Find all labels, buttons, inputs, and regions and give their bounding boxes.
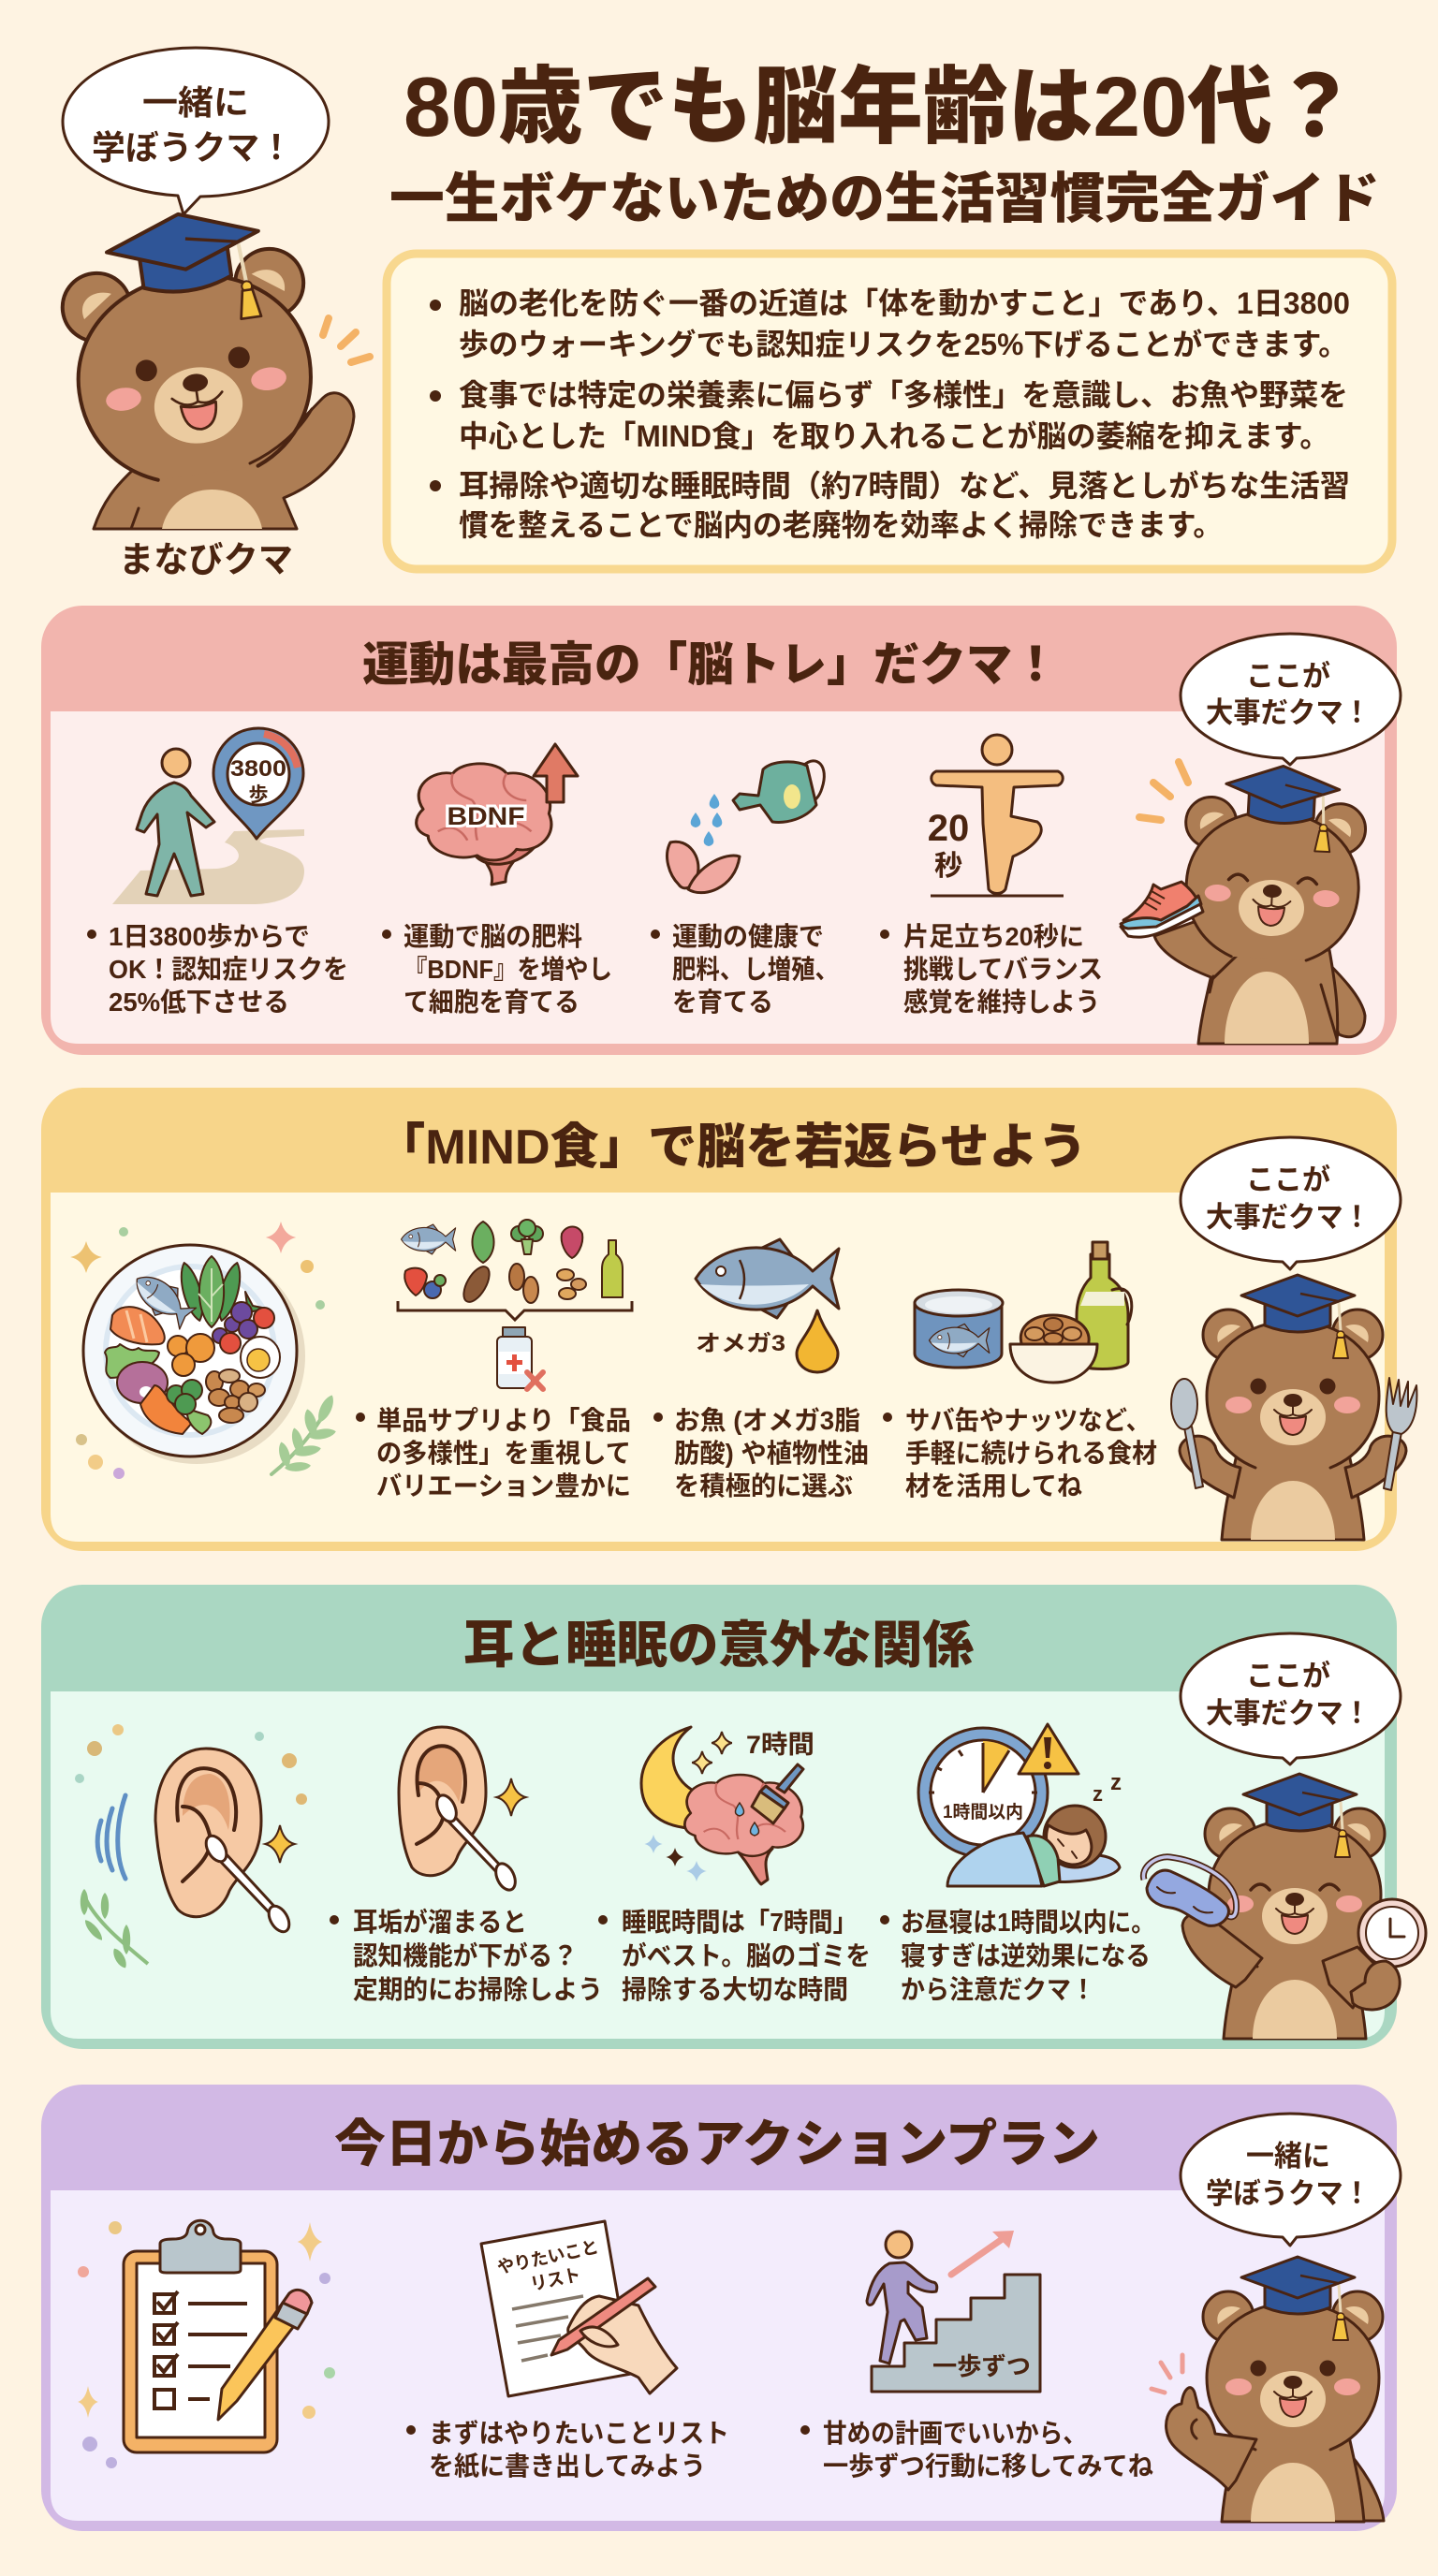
heading: exercise: 運動は最高の「脳トレ」だクマ！ (362, 638, 1059, 691)
summary box (387, 254, 1392, 569)
icon: one-leg balance 20 seconds (928, 735, 1064, 896)
text: action point 2: 甘めの計画でいいから、 (823, 2419, 1087, 2448)
summary box: 耳掃除や適切な睡眠時間（約7時間）など、見落としがちな生活習 (459, 469, 1350, 503)
panel: ears and sleep (41, 1585, 1426, 2049)
panel: exercise (41, 606, 1401, 1055)
text: exercise point 4: 挑戦してバランス (903, 955, 1103, 984)
icon: nap clock and sleeper: 1時間以内 (943, 1802, 1023, 1822)
panel: MIND diet (41, 1088, 1416, 1551)
heading: ears and sleep: 耳と睡眠の意外な関係 (463, 1617, 974, 1674)
text: diet point 1: バリエーション豊かに (376, 1471, 631, 1500)
text: ears point 1: 耳垢が溜まると (353, 1907, 527, 1937)
speech bubble: 一緒に学ぼうクマ: 学ぼうクマ！ (1206, 2177, 1371, 2210)
summary box: 慣を整えることで脳内の老廃物を効率よく掃除できます。 (459, 508, 1223, 542)
icon: walker with 3800 steps pin: 歩 (249, 784, 268, 806)
speech bubble: ここが大事だクマ: ここが (1246, 1660, 1330, 1692)
icon: plate of food (70, 1222, 337, 1479)
speech bubble: 一緒に学ぼうクマ: 一緒に (142, 83, 249, 122)
heading: MIND diet: 「MIND食」で脳を若返らせよう (376, 1120, 1087, 1175)
speech bubble: 一緒に学ぼうクマ (1181, 2114, 1401, 2246)
text: exercise point 1: OK！認知症リスクを (109, 955, 348, 984)
speech bubble: ここが大事だクマ: 大事だクマ！ (1206, 696, 1371, 729)
icon: person climbing stairs (867, 2231, 1040, 2392)
text: action point 2: 一歩ずつ行動に移してみてね (823, 2452, 1153, 2481)
speech bubble: 一緒に学ぼうクマ: 学ぼうクマ！ (92, 128, 293, 167)
icon: canned fish, nuts and oil (915, 1242, 1132, 1383)
text: exercise point 2: て細胞を育てる (404, 988, 580, 1017)
text: action point 1: を紙に書き出してみよう (429, 2452, 706, 2481)
text: exercise point 3 (651, 922, 839, 1017)
subtitle: 一生ボケないための生活習慣完全ガイド (389, 168, 1380, 229)
text: diet point 1: の多様性」を重視して (376, 1439, 631, 1468)
speech bubble: ここが大事だクマ (1181, 1633, 1401, 1764)
heading: action plan: 今日から始めるアクションプラン (334, 2116, 1100, 2173)
mascot: bear with shoe (1121, 761, 1369, 1044)
mascot: bear with spoon and fork (1171, 1275, 1416, 1540)
icon: to-do list and writing hand (481, 2221, 677, 2396)
text: ears point 1: 認知機能が下がる？ (353, 1940, 578, 1970)
text: diet point 2: を積極的に選ぶ (674, 1471, 853, 1500)
text: exercise point 4: 感覚を維持しよう (903, 988, 1100, 1017)
summary box: 歩のウォーキングでも認知症リスクを25%下げることができます。 (459, 328, 1348, 361)
text: exercise point 1 (87, 922, 348, 1017)
icon: food variety over supplements (398, 1220, 632, 1389)
text: exercise point 3: を育てる (672, 988, 773, 1017)
icon: tuna and omega 3 drop: オメガ3 (696, 1331, 785, 1356)
text: action point 2 (800, 2419, 1153, 2481)
text: action point 1 (406, 2419, 729, 2481)
speech bubble: ここが大事だクマ: ここが (1246, 660, 1330, 693)
text: ears point 3: 寝すぎは逆効果になる (901, 1941, 1151, 1970)
icon: ear with swab and sound waves (75, 1724, 307, 1970)
speech bubble: ここが大事だクマ (1181, 1137, 1401, 1269)
text: exercise point 2 (382, 922, 612, 1017)
speech bubble: ここが大事だクマ: 大事だクマ！ (1206, 1697, 1371, 1730)
icon: brain with BDNF: BDNF (448, 802, 524, 830)
text: exercise point 4: 片足立ち20秒に (903, 922, 1084, 951)
icon: ear with cotton swab (399, 1727, 526, 1893)
text: ears point 1 (330, 1907, 603, 2004)
icon: watering can and seeds (668, 761, 824, 893)
summary box: 脳の老化を防ぐ一番の近道は「体を動かすこと」であり、1日3800 (459, 286, 1350, 320)
text: exercise point 3: 肥料、し増殖、 (672, 955, 839, 984)
text: ears point 3: から注意だクマ！ (901, 1975, 1095, 2004)
mascot: まなびクマ waving (51, 198, 370, 529)
speech bubble: ここが大事だクマ: ここが (1246, 1164, 1330, 1196)
panel: action plan (41, 2085, 1401, 2531)
icon: moon, brain and broom, 7 hours: 7時間 (746, 1731, 814, 1759)
icon: to-do list and writing hand: リスト (529, 2265, 582, 2295)
icon: nap clock and sleeper: z (1110, 1770, 1122, 1795)
text: exercise point 3: 運動の健康で (672, 922, 824, 951)
icon: clipboard and pencil (78, 2220, 335, 2468)
text: diet point 3 (883, 1406, 1157, 1500)
text: ears point 1: 定期的にお掃除しよう (353, 1975, 603, 2004)
icon: to-do list and writing hand: やりたいこと (495, 2237, 600, 2278)
text: diet point 3: サバ缶やナッツなど、 (905, 1406, 1151, 1435)
title: 80歳でも脳年齢は20代？ (404, 61, 1357, 154)
text: diet point 2: 肪酸) や植物性油 (674, 1439, 869, 1468)
text: exercise point 1: 1日3800歩からで (109, 922, 310, 951)
speech bubble: 一緒に学ぼうクマ: 一緒に (1246, 2140, 1330, 2173)
speech bubble: 一緒に学ぼうクマ (63, 48, 329, 214)
text: exercise point 2: 『BDNF』を増やし (404, 955, 612, 984)
mascot: bear with thumbs up (1152, 2257, 1384, 2522)
text: diet point 1 (356, 1406, 631, 1500)
text: ears point 2: がベスト。脳のゴミを (622, 1940, 871, 1970)
icon: nap clock and sleeper (918, 1724, 1122, 1886)
text: diet point 3: 材を活用してね (905, 1471, 1082, 1500)
text: diet point 2 (653, 1406, 869, 1500)
text: ears point 3 (880, 1908, 1155, 2004)
mascot: bear with eye mask and clock (1143, 1774, 1426, 2039)
text: ears point 3: お昼寝は1時間以内に。 (901, 1908, 1155, 1937)
summary box: 中心とした「MIND食」を取り入れることが脳の萎縮を抑えます。 (459, 419, 1329, 453)
icon: one-leg balance 20 seconds: 20 (928, 808, 969, 849)
text: exercise point 4 (880, 922, 1103, 1017)
text: exercise point 2: 運動で脳の肥料 (404, 922, 582, 951)
text: diet point 3: 手軽に続けられる食材 (905, 1439, 1157, 1468)
speech bubble: ここが大事だクマ (1181, 634, 1401, 765)
summary box: 食事では特定の栄養素に偏らず「多様性」を意識し、お魚や野菜を (459, 378, 1348, 412)
text: ears point 2: 掃除する大切な時間 (622, 1975, 848, 2004)
icon: moon, brain and broom, 7 hours (641, 1727, 814, 1884)
icon: tuna and omega 3 drop (696, 1239, 839, 1372)
text: exercise point 1: 25%低下させる (109, 988, 289, 1017)
icon: person climbing stairs: 一歩ずつ (932, 2352, 1031, 2380)
text: ears point 2: 睡眠時間は「7時間」 (622, 1908, 858, 1937)
text: diet point 1: 単品サプリより「食品 (376, 1406, 631, 1435)
icon: nap clock and sleeper: z (1093, 1782, 1103, 1806)
icon: brain with BDNF (417, 744, 578, 885)
text: ears point 2 (598, 1908, 871, 2004)
label: まなびクマ: まなびクマ (119, 541, 293, 580)
speech bubble: ここが大事だクマ: 大事だクマ！ (1206, 1201, 1371, 1234)
icon: one-leg balance 20 seconds: 秒 (934, 851, 962, 882)
text: action point 1: まずはやりたいことリスト (429, 2419, 729, 2448)
text: diet point 2: お魚 (オメガ3脂 (674, 1406, 860, 1435)
icon: walker with 3800 steps pin: 3800 (230, 756, 286, 782)
icon: walker with 3800 steps pin (112, 728, 304, 904)
